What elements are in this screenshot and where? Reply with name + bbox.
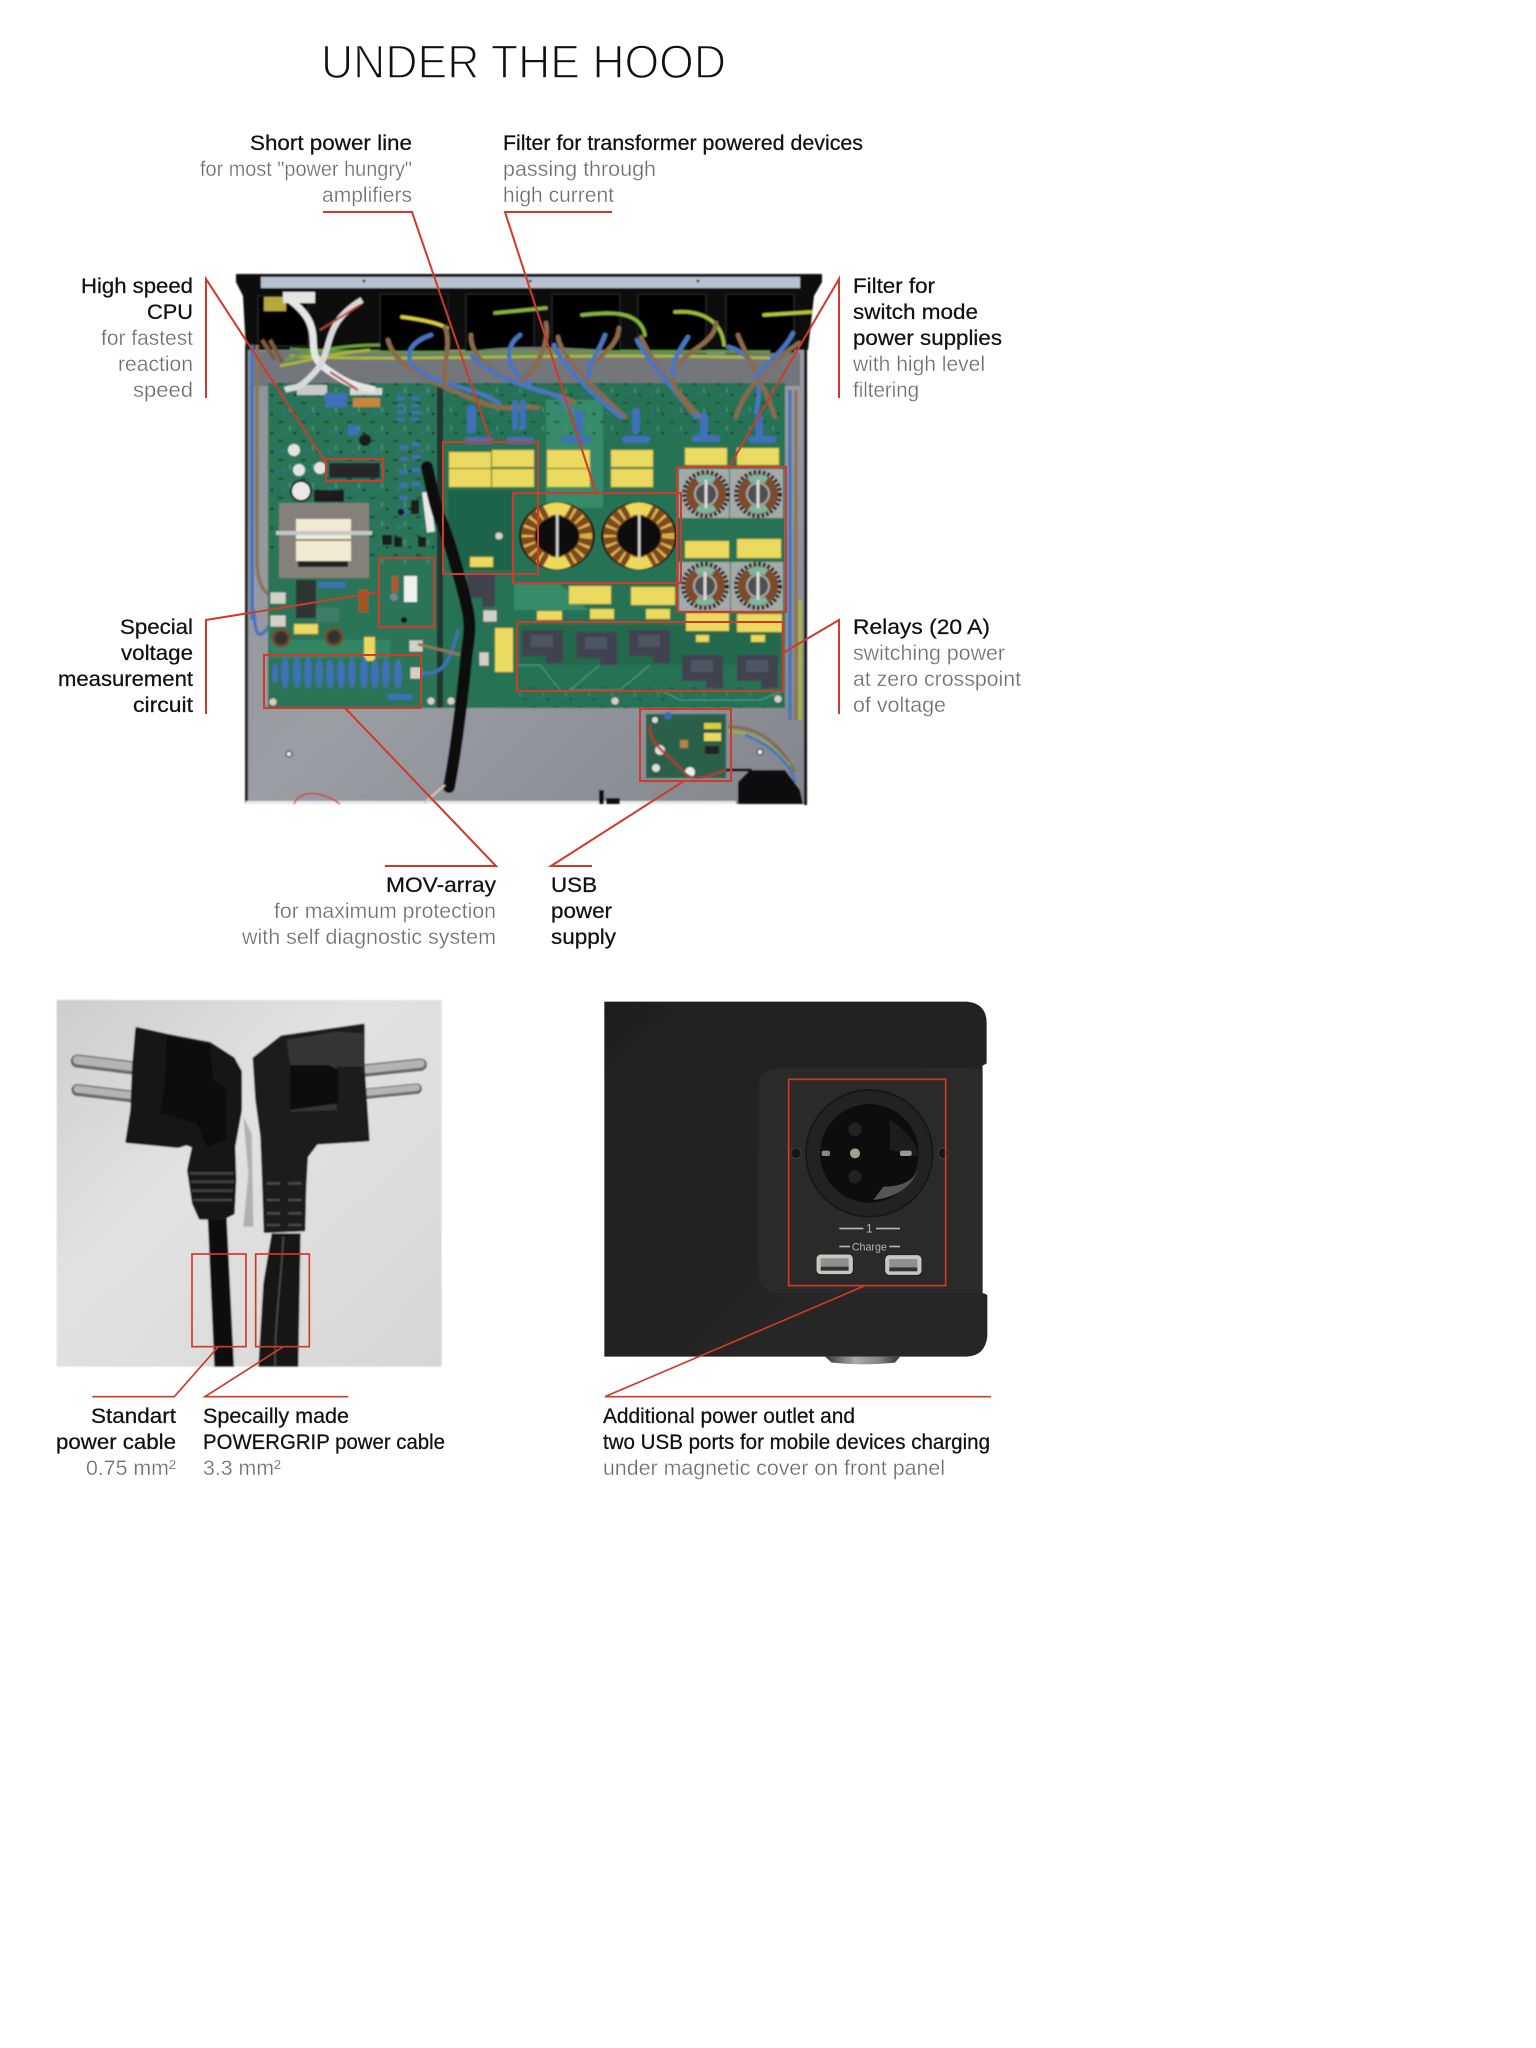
label: high speed CPU: reaction (118, 353, 193, 376)
label: POWERGRIP power cable: POWERGRIP power cable (203, 1431, 445, 1454)
label: USB power supply: power (551, 900, 612, 923)
callout box and leader (605, 1079, 991, 1397)
mounting hardware (269, 532, 782, 706)
dark copper pours (448, 490, 780, 665)
box: relays (517, 622, 783, 691)
CPU chip (329, 463, 380, 478)
label: special voltage measurement circuit: circuit (133, 694, 193, 717)
label: filter for switch mode power supplies: power supplies (853, 327, 1002, 350)
mains wires to filter boards (388, 323, 799, 417)
box: switch mode filter (677, 467, 786, 612)
label: short power line: for most "power hungry" (200, 158, 412, 181)
right plug strain relief ribs (267, 1183, 303, 1225)
label: filter for transformer powered devices (503, 132, 863, 207)
panel: power plugs photo (57, 1000, 442, 1397)
left side wires (250, 345, 254, 620)
leader: standard cable (92, 1347, 218, 1397)
label: filter for switch mode power supplies: switch mode (853, 301, 978, 324)
label: MOV-array (241, 874, 497, 949)
right cable groove (275, 1237, 283, 1367)
leader: transformer filter (505, 212, 612, 493)
small chokes on control board (273, 629, 342, 646)
socket well (820, 1104, 919, 1203)
socket reflection (873, 1170, 918, 1200)
right plug grip face (287, 1032, 363, 1112)
label: filter for transformer powered devices: passing through (503, 158, 656, 181)
label: relays: Relays (20 A) (853, 616, 990, 639)
label: special voltage measurement circuit (58, 616, 193, 717)
chassis side walls (245, 345, 248, 803)
title: UNDER THE HOOD (321, 35, 726, 88)
label: POWERGRIP power cable (203, 1405, 445, 1480)
label: special voltage measurement circuit: voltage (121, 642, 193, 665)
box: transformer filter (513, 493, 681, 583)
plug shadow (243, 1117, 253, 1227)
photo background (57, 1000, 442, 1367)
label: filter for switch mode power supplies: filtering (853, 379, 919, 402)
component specks (268, 383, 437, 563)
box: voltage measurement (379, 558, 434, 627)
leader: relays (783, 620, 839, 714)
left plug highlight (160, 1036, 227, 1147)
label: special voltage measurement circuit: measurement (58, 668, 193, 691)
label: filter for switch mode power supplies (852, 275, 1002, 402)
socket number: 1 (866, 1222, 873, 1236)
white sleeve (426, 492, 431, 532)
label: high speed CPU: speed (133, 379, 193, 402)
label: additional power outlet and USB ports (603, 1405, 990, 1480)
dark front plate (604, 1002, 987, 1357)
left plug strain relief ribs (190, 1173, 234, 1200)
label: high speed CPU: High speed (81, 275, 193, 298)
ribbon cable connector and twisted pair (283, 292, 375, 390)
box: short power line (443, 442, 538, 574)
label: relays (853, 616, 1021, 717)
label: short power line: amplifiers (322, 184, 412, 207)
panel: circuit board photo (236, 274, 822, 805)
label: additional power outlet and USB ports: two USB ports for mobile devices charging (603, 1431, 990, 1454)
control board capacitors (288, 444, 344, 502)
USB supply mains wires (726, 727, 795, 782)
label: MOV-array: for maximum protection (274, 900, 496, 923)
callout boxes and leaders (92, 1254, 348, 1397)
label: filter for transformer powered devices: high current (503, 184, 614, 207)
wire from varistors (422, 630, 458, 673)
leader: outlet and USB ports (605, 1286, 991, 1397)
yellow capacitors (294, 448, 782, 672)
large toroidal chokes (519, 502, 677, 570)
label: filter for switch mode power supplies: Filter for (853, 275, 935, 298)
leader: USB supply (551, 781, 684, 866)
leader: short power line (323, 212, 491, 442)
label: POWERGRIP power cable: 3.3 mm² (203, 1457, 281, 1480)
leader: MOV array (345, 708, 496, 866)
dark transistors (359, 434, 426, 547)
label: high speed CPU (81, 275, 193, 402)
voltage measurement components (296, 576, 417, 623)
signal component columns (348, 397, 420, 516)
label: standard power cable (56, 1405, 176, 1480)
left plug prongs (77, 1060, 137, 1097)
leader: CPU (206, 279, 326, 463)
small toroidal chokes (684, 473, 779, 607)
label: standard power cable: power cable (56, 1431, 176, 1454)
USB port left (816, 1254, 853, 1275)
right plug prongs (363, 1064, 421, 1094)
socket number (839, 1222, 900, 1254)
box: MOV array (264, 655, 421, 708)
label: MOV-array: MOV-array (386, 874, 497, 897)
foot (825, 1357, 900, 1364)
recessed cover area (758, 1068, 992, 1293)
control board connectors and resistor packs (297, 385, 382, 407)
socket number: Charge (852, 1242, 887, 1254)
box: CPU (326, 459, 383, 481)
USB port right (885, 1255, 922, 1275)
label: standard power cable: 0.75 mm² (86, 1457, 176, 1480)
cover screws (791, 1148, 949, 1159)
label: relays: of voltage (853, 694, 946, 717)
leader: switch mode filter (729, 279, 839, 467)
transformer (276, 503, 372, 578)
socket holes (822, 1123, 912, 1183)
outlet connector blocks (258, 294, 794, 354)
label: high speed CPU: for fastest (101, 327, 193, 350)
bottom edge details (246, 785, 736, 804)
box: standard cable (192, 1254, 246, 1347)
label: high speed CPU: CPU (147, 301, 193, 324)
USB power supply board (646, 712, 726, 778)
metal oxide varistors (272, 656, 413, 700)
yellow fuse holder (264, 297, 286, 311)
board traces (517, 665, 785, 700)
socket ring (806, 1090, 933, 1217)
left plug body (127, 1028, 241, 1218)
gray insulating band (250, 347, 800, 386)
blue filter components row (465, 400, 776, 444)
label: filter for transformer powered devices: Filter for transformer powered devices (503, 132, 863, 155)
black cable harness (427, 467, 469, 787)
label: short power line (200, 132, 412, 207)
label: relays: switching power (853, 642, 1005, 665)
label: additional power outlet and USB ports: Additional power outlet and (603, 1405, 855, 1428)
box: outlet and USB ports (789, 1079, 946, 1286)
control circuit board (268, 383, 437, 708)
label: filter for switch mode power supplies: with high level (852, 353, 985, 376)
label: additional power outlet and USB ports: under magnetic cover on front panel (603, 1457, 945, 1480)
box: USB supply (640, 709, 731, 781)
lighter copper regions (270, 400, 603, 658)
label: standard power cable: Standart (91, 1405, 176, 1428)
label: USB power supply (551, 874, 617, 949)
ground wires bundle (280, 345, 770, 366)
label: short power line: Short power line (250, 132, 412, 155)
label: MOV-array: with self diagnostic system (241, 926, 496, 949)
label: USB power supply: supply (551, 926, 617, 949)
chassis floor (246, 288, 807, 804)
gap between boards (437, 383, 443, 708)
callout boxes and leader lines: circuit board (206, 212, 839, 866)
right side wires (790, 390, 800, 720)
left cable (208, 1217, 234, 1367)
relays (467, 573, 778, 688)
leader: POWERGRIP cable (205, 1347, 348, 1397)
panel: front panel photo (604, 1002, 993, 1397)
green and yellow earth wires (402, 308, 811, 345)
right cable (258, 1233, 301, 1367)
gray ferrite plates (679, 469, 783, 611)
right plug body (254, 1025, 368, 1232)
label: relays: at zero crosspoint (853, 668, 1021, 691)
label: USB power supply: USB (551, 874, 597, 897)
box: POWERGRIP cable (256, 1254, 309, 1347)
mounting holes (286, 749, 763, 757)
leader: voltage measurement (206, 592, 379, 714)
label: POWERGRIP power cable: Specailly made (203, 1405, 349, 1428)
label: special voltage measurement circuit: Special (120, 616, 193, 639)
silver rear bar (261, 277, 800, 288)
power circuit board (443, 383, 785, 708)
black rear connector area (236, 274, 822, 350)
mains socket rear (738, 770, 803, 804)
